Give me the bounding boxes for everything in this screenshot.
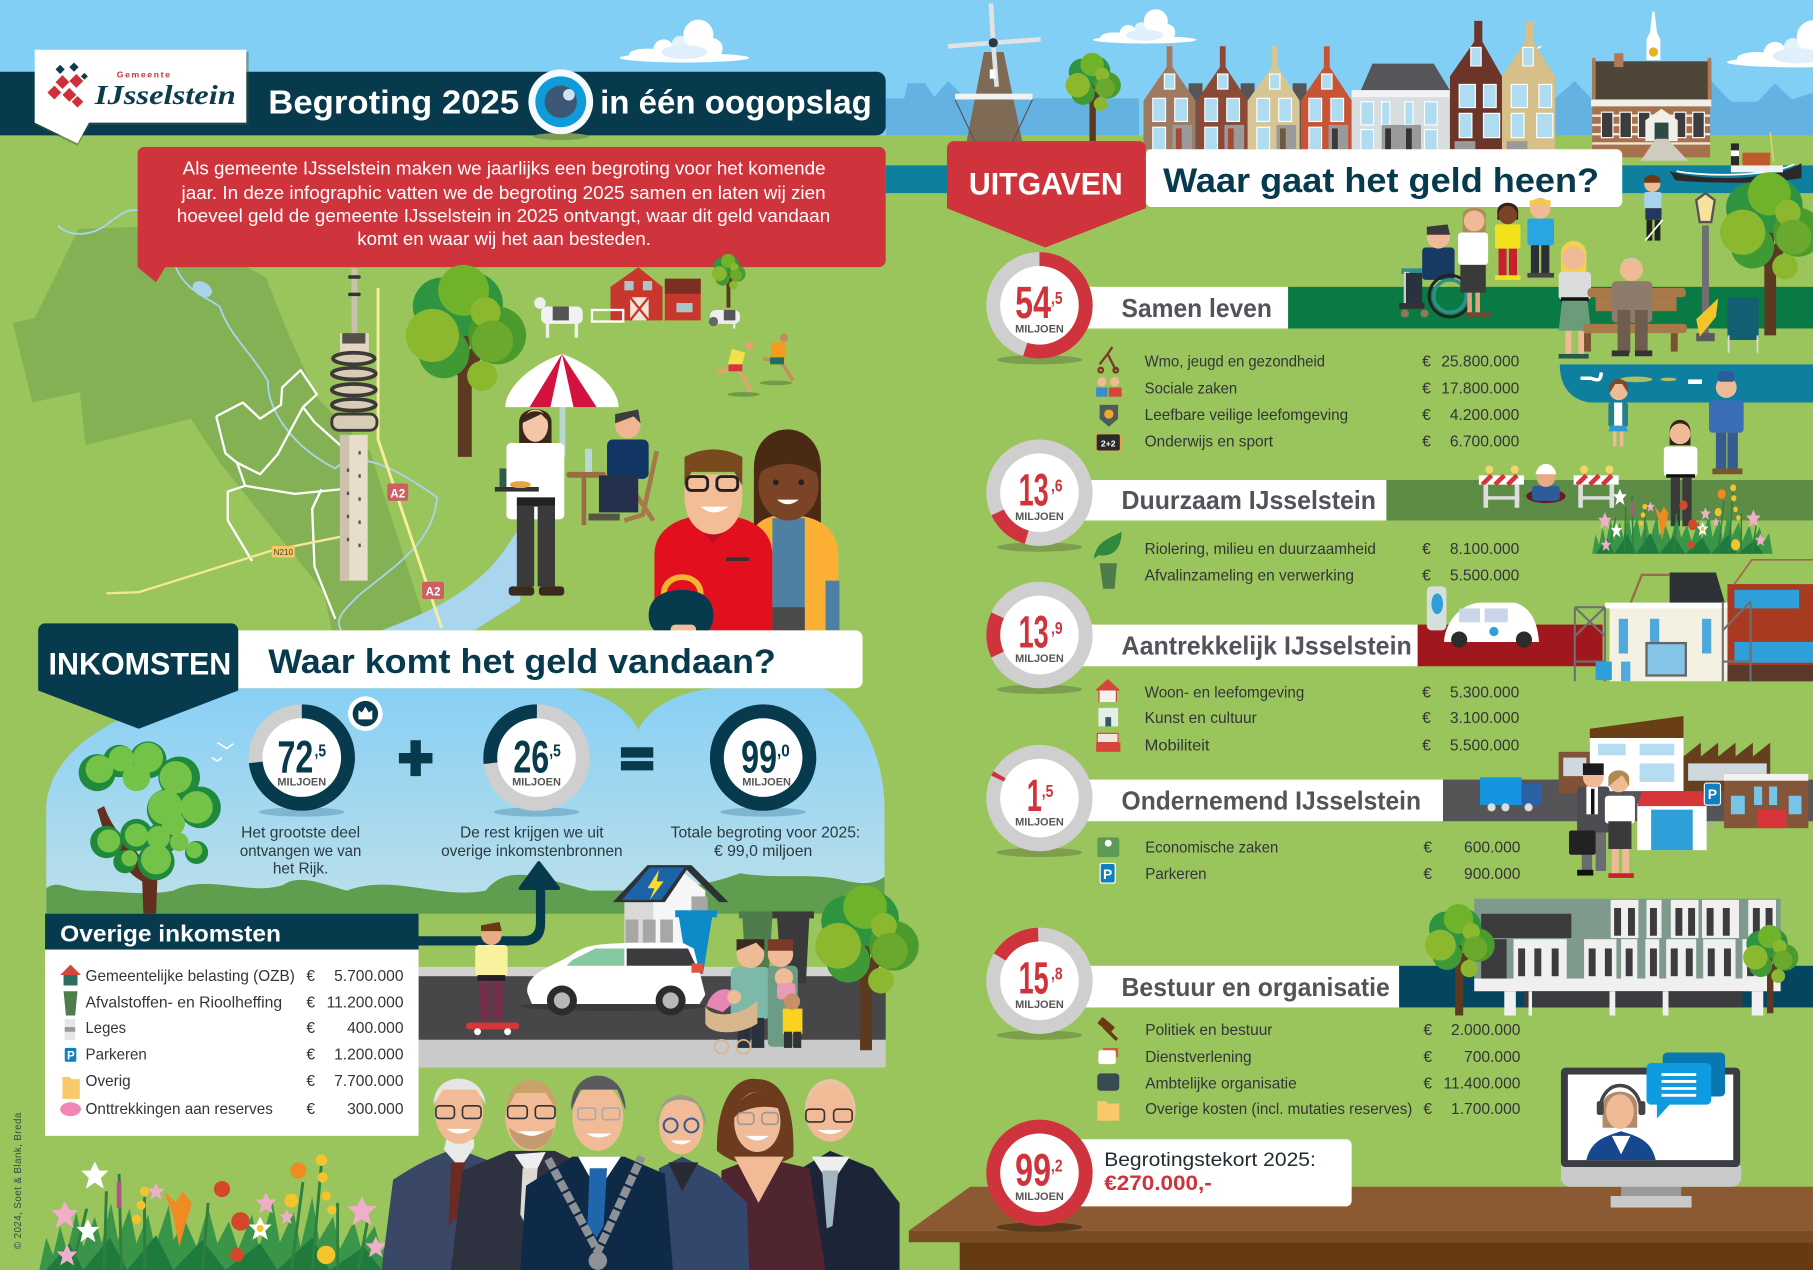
list: Aantrekkelijk	[1095, 679, 1520, 755]
white family car	[520, 943, 705, 1016]
icon: chalkboard: 2+2	[1101, 438, 1116, 448]
town office building	[1474, 899, 1781, 1016]
income rows: Parkeren	[86, 1046, 147, 1063]
icon: castle	[1098, 708, 1118, 726]
spending lists	[1094, 347, 1521, 1121]
list: Bestuur: 2.000.000	[1451, 1022, 1521, 1039]
list: Ondernemend: Parkeren	[1145, 866, 1207, 883]
list: Samen leven: €	[1422, 407, 1431, 424]
donut 99,2	[993, 1127, 1086, 1232]
small tree near barn	[712, 254, 746, 308]
caption overige bronnen	[441, 824, 623, 860]
bar: Duurzaam IJsselstein: Duurzaam IJsselstein	[1122, 487, 1376, 515]
row of canal houses	[1144, 21, 1555, 150]
list: Ondernemend: €	[1423, 839, 1432, 856]
police officer	[1709, 371, 1744, 474]
donut 15,8: MILJOEN	[1015, 999, 1064, 1011]
house 5	[1352, 64, 1450, 150]
caption totale begroting: € 99,0 miljoen	[714, 843, 812, 860]
tree at office right	[1743, 925, 1798, 1013]
donut 54,5	[993, 259, 1086, 364]
donut 15,8	[976, 917, 1103, 1044]
list: Samen leven: Sociale zaken	[1145, 380, 1237, 397]
donut 13,9: MILJOEN	[1015, 653, 1064, 665]
list: Aantrekkelijk: 5.300.000	[1450, 684, 1520, 701]
tree at office left	[1425, 904, 1495, 1016]
list: Samen leven: €	[1422, 354, 1431, 371]
wheelchair group	[1399, 175, 1663, 318]
bar: Ondernemend IJsselstein: Ondernemend IJsselstein	[1122, 788, 1421, 816]
icon: shield	[1100, 405, 1118, 427]
icon: eye	[528, 69, 593, 140]
monitor with customer service agent	[1561, 1068, 1741, 1208]
woman in white shirt	[1664, 420, 1697, 526]
donut 26,5 miljoen: 26	[513, 732, 549, 783]
panel heading	[45, 914, 419, 950]
person 4	[653, 1095, 749, 1270]
caption Rijk: het Rijk.	[273, 860, 328, 877]
seated man at cafe table	[567, 409, 657, 525]
donut 1,5: ,5	[1042, 781, 1054, 801]
house with solar panels	[613, 865, 728, 948]
waste bins	[675, 910, 814, 983]
hockey girl	[1644, 175, 1663, 241]
income rows: €	[306, 968, 315, 985]
icon: gavel	[1097, 1017, 1117, 1040]
IJsselstein tower	[332, 268, 377, 581]
council portraits	[382, 1076, 900, 1270]
list: Aantrekkelijk: €	[1422, 710, 1431, 727]
man	[654, 449, 772, 630]
icon: speech bubble	[1098, 1048, 1118, 1064]
caption totale begroting	[671, 824, 860, 860]
icon: piggy bank	[60, 1102, 81, 1116]
list: Aantrekkelijk: Woon- en leefomgeving	[1145, 684, 1304, 701]
list: Samen leven: Leefbare veilige leefomgeving	[1145, 407, 1348, 424]
bar: Duurzaam IJsselstein	[1081, 480, 1813, 520]
icon: parking: P	[1103, 866, 1112, 882]
building under construction	[1575, 560, 1813, 681]
litter bin	[1727, 297, 1759, 353]
logo Gemeente IJsselstein: IJsselstein	[94, 80, 236, 111]
list: Duurzaam: €	[1422, 568, 1431, 585]
road badge A2 south	[422, 582, 444, 599]
title text right: in één oogopslag	[600, 84, 872, 121]
heading INKOMSTEN: INKOMSTEN	[49, 646, 231, 681]
icon: banknote	[1097, 837, 1119, 857]
donut 99,0 miljoen: MILJOEN	[742, 776, 791, 788]
road works barriers and worker	[1479, 464, 1619, 508]
wheelchair man	[1399, 224, 1471, 318]
intro callout: jaar. In deze infographic vatten we de begroting 2025 samen en laten wij zien	[180, 182, 826, 203]
icon: briefcase	[1097, 1073, 1119, 1091]
girl in yellow	[1495, 203, 1520, 280]
icon: bin	[1100, 563, 1117, 589]
intro callout	[138, 147, 886, 282]
desk	[909, 1187, 1813, 1270]
income rows: Onttrekkingen aan reserves	[86, 1101, 273, 1118]
list: Bestuur: Politiek en bestuur	[1145, 1022, 1272, 1039]
income rows: 1.200.000	[334, 1046, 404, 1063]
town hall	[1591, 12, 1711, 161]
tree by the tower	[406, 265, 526, 457]
road badge N210: N210	[274, 548, 293, 557]
windmill	[948, 3, 1041, 141]
list: Duurzaam	[1094, 532, 1520, 589]
family with pram	[705, 939, 802, 1054]
income rows: Overig	[86, 1073, 131, 1090]
list: Duurzaam: Riolering, milieu en duurzaamheid	[1145, 541, 1376, 558]
list: Aantrekkelijk: 5.500.000	[1450, 738, 1520, 755]
list: Samen leven: 25.800.000	[1441, 354, 1520, 371]
caption Rijk: Het grootste deel	[241, 824, 360, 841]
income rows: €	[306, 1101, 315, 1118]
road badge A2: A2	[390, 488, 405, 500]
donut 99,0 miljoen	[717, 711, 809, 817]
begrotingstekort	[1064, 1139, 1352, 1206]
donut 99,0 miljoen: 99	[741, 732, 777, 783]
donut 54,5: ,5	[1051, 288, 1063, 308]
section header UITGAVEN	[947, 141, 1622, 248]
bar: Ondernemend IJsselstein	[1081, 780, 1813, 821]
business buildings: P	[1708, 786, 1717, 802]
map of IJsselstein	[13, 210, 520, 630]
person 6	[786, 1079, 900, 1270]
icon: walker	[1098, 347, 1118, 372]
list: Aantrekkelijk: Kunst en cultuur	[1145, 710, 1257, 727]
donut 15,8: 15	[1019, 953, 1049, 1004]
list: Bestuur: Ambtelijke organisatie	[1145, 1075, 1297, 1092]
icon: purse	[649, 577, 713, 641]
donut 13,9: 13	[1019, 607, 1049, 658]
bar: Bestuur en organisatie: Bestuur en organisatie	[1122, 974, 1390, 1002]
caption totale begroting: Totale begroting voor 2025:	[671, 824, 860, 841]
panel heading: Overige inkomsten	[60, 921, 281, 947]
couple with purse	[649, 429, 839, 641]
donut 72,5 miljoen: ,5	[314, 740, 326, 760]
person 2	[451, 1080, 590, 1270]
list: Aantrekkelijk: €	[1422, 684, 1431, 701]
business buildings	[1559, 716, 1808, 850]
house 1	[1144, 46, 1196, 150]
list: Bestuur: 1.700.000	[1451, 1101, 1521, 1118]
tree near lamp	[1720, 172, 1813, 335]
runners	[717, 334, 793, 397]
caption overige bronnen: overige inkomstenbronnen	[441, 843, 623, 860]
tree between windmill and houses	[1066, 53, 1121, 141]
list: Bestuur: Dienstverlening	[1145, 1049, 1252, 1066]
icon: parking	[65, 1048, 76, 1062]
donut 54,5: MILJOEN	[1015, 324, 1064, 336]
clouds	[620, 9, 1813, 67]
donut 13,9	[978, 574, 1101, 696]
list: Bestuur: 700.000	[1464, 1049, 1521, 1066]
caption Rijk: ontvangen we van	[240, 843, 361, 860]
delivery truck	[1480, 777, 1541, 811]
arrow up to donut	[419, 863, 558, 944]
plus sign	[399, 740, 432, 776]
house 3	[1248, 46, 1300, 150]
donut 13,6: 13	[1019, 464, 1049, 515]
donut 26,5 miljoen: ,5	[549, 740, 561, 760]
girl in teal jacket	[1608, 379, 1628, 446]
income rows: €	[306, 1073, 315, 1090]
farm barn and cows	[534, 267, 740, 338]
parasol	[505, 354, 619, 457]
income rows: 400.000	[347, 1020, 404, 1037]
icon: leges	[65, 1019, 75, 1040]
icon: bin	[64, 991, 77, 1016]
list: Bestuur: Overige kosten (incl. mutaties reserves)	[1145, 1101, 1412, 1118]
chat bubbles	[1646, 1053, 1725, 1118]
income rows: €	[306, 1046, 315, 1063]
street lamp	[1696, 193, 1715, 341]
list: Samen leven: €	[1422, 380, 1431, 397]
waitress	[495, 409, 564, 596]
donut 72,5 miljoen	[256, 711, 348, 817]
list: Bestuur	[1097, 1017, 1521, 1121]
donut 72,5 miljoen: MILJOEN	[277, 776, 326, 788]
house 2	[1197, 46, 1248, 150]
road badge A2 south: A2	[426, 587, 440, 599]
person 5	[717, 1079, 826, 1270]
copyright: © 2024, Soet & Blank, Breda	[13, 1112, 24, 1249]
list: Samen leven: Onderwijs en sport	[1145, 433, 1274, 450]
donut 1,5: 1	[1027, 770, 1042, 821]
person 3: mayor with chain	[520, 1076, 673, 1270]
birds	[212, 44, 1541, 761]
bar: Samen leven: Samen leven	[1122, 295, 1272, 323]
list: Duurzaam: 8.100.000	[1450, 541, 1520, 558]
title text left: Begroting 2025	[268, 84, 519, 121]
tree right of road	[815, 885, 919, 1050]
donut 26,5 miljoen	[485, 706, 588, 817]
house 7	[1502, 21, 1555, 150]
donut 13,9: ,9	[1051, 618, 1063, 638]
list: Aantrekkelijk: Mobiliteit	[1145, 738, 1210, 755]
caption Rijk	[240, 824, 361, 877]
donut 13,6: MILJOEN	[1015, 511, 1064, 523]
list: Samen leven: €	[1422, 433, 1431, 450]
list: Bestuur: €	[1423, 1075, 1432, 1092]
icon: parking	[1100, 863, 1116, 884]
list: Bestuur: €	[1423, 1022, 1432, 1039]
bar: Bestuur en organisatie	[1081, 966, 1813, 1007]
icon: Rijk badge	[348, 696, 383, 731]
donut 15,8: ,8	[1051, 964, 1063, 984]
house 4	[1301, 46, 1352, 150]
pond with ducks	[1560, 364, 1813, 403]
woman	[749, 429, 839, 630]
heading waar komt: Waar komt het geld vandaan?	[268, 643, 776, 681]
intro callout: hoeveel geld de gemeente IJsselstein in 2025 ontvangt, waar dit geld vandaan	[177, 205, 830, 226]
logo Gemeente IJsselstein: Gemeente	[117, 69, 170, 79]
list: Bestuur: €	[1423, 1101, 1432, 1118]
sky panel income	[46, 688, 886, 1068]
icon: leaf	[1094, 532, 1122, 559]
icon: people	[1096, 377, 1122, 397]
donut 99,2: ,2	[1051, 1156, 1063, 1176]
donut 13,6	[982, 436, 1097, 552]
bar: Aantrekkelijk IJsselstein	[1081, 625, 1603, 666]
list: Ondernemend: €	[1423, 866, 1432, 883]
boy on skateboard	[466, 922, 519, 1035]
list: Duurzaam: Afvalinzameling en verwerking	[1145, 568, 1354, 585]
intro callout: komt en waar wij het aan besteden.	[357, 228, 651, 249]
list: Ondernemend: 600.000	[1464, 839, 1521, 856]
list: Ondernemend: 900.000	[1464, 866, 1521, 883]
income rows: €	[306, 994, 315, 1011]
list: Duurzaam: €	[1422, 541, 1431, 558]
equals sign	[621, 747, 653, 770]
bench with elderly man	[1583, 258, 1687, 356]
donut 54,5: 54	[1015, 277, 1051, 328]
section header INKOMSTEN	[38, 623, 863, 729]
kite	[1696, 298, 1718, 337]
income rows: 300.000	[347, 1101, 404, 1118]
donut 26,5 miljoen: MILJOEN	[512, 776, 561, 788]
list: Samen leven	[1096, 347, 1520, 451]
logo Gemeente IJsselstein	[35, 50, 249, 146]
income rows: Afvalstoffen- en Rioolheffing	[86, 994, 282, 1011]
donut 13,6: ,6	[1051, 476, 1063, 496]
road badge A2	[387, 483, 408, 501]
business man and woman	[1569, 763, 1635, 878]
heading UITGAVEN: UITGAVEN	[969, 166, 1123, 201]
icon: parking: P	[67, 1050, 75, 1062]
list: Samen leven: 17.800.000	[1441, 380, 1520, 397]
caption overige bronnen: De rest krijgen we uit	[460, 824, 604, 841]
donut 99,2: 99	[1015, 1145, 1051, 1196]
woman in white blouse	[1458, 208, 1490, 317]
income rows: Gemeentelijke belasting (OZB)	[86, 968, 295, 985]
income rows	[86, 968, 404, 1118]
income rows: 7.700.000	[334, 1073, 404, 1090]
list: Samen leven: Wmo, jeugd en gezondheid	[1145, 354, 1325, 371]
list: Ondernemend: Economische zaken	[1145, 839, 1278, 856]
donut 1,5: MILJOEN	[1015, 816, 1064, 828]
list: Bestuur: 11.400.000	[1444, 1075, 1521, 1092]
list: Samen leven: 4.200.000	[1450, 407, 1520, 424]
person 1	[382, 1079, 509, 1270]
income rows: €	[306, 1020, 315, 1037]
panel: overige inkomsten	[45, 914, 419, 1136]
income rows: 5.700.000	[334, 968, 404, 985]
flower bed right	[1592, 484, 1773, 554]
bar: Samen leven	[1081, 287, 1813, 328]
bar: Aantrekkelijk IJsselstein: Aantrekkelijk IJsselstein	[1122, 633, 1412, 661]
road badge N210	[272, 546, 295, 558]
donut 72,5 miljoen: 72	[278, 732, 313, 783]
icon: house	[1095, 679, 1120, 702]
icon: house	[60, 965, 81, 985]
list: Samen leven: 6.700.000	[1450, 433, 1520, 450]
electric car and charger	[1427, 586, 1539, 648]
blonde woman	[1559, 241, 1591, 359]
icon: chalkboard	[1096, 434, 1120, 451]
icon: car	[1096, 733, 1120, 752]
list: Aantrekkelijk: €	[1422, 738, 1431, 755]
heading waar gaat: Waar gaat het geld heen?	[1163, 162, 1599, 200]
list: Ondernemend	[1097, 837, 1521, 884]
icon: folder	[62, 1077, 80, 1099]
steam boat	[1670, 132, 1801, 183]
income rows: Leges	[86, 1020, 126, 1037]
donut 99,2: MILJOEN	[1015, 1191, 1064, 1203]
icon: folder	[1097, 1101, 1119, 1121]
donut 1,5	[978, 737, 1101, 860]
wildflowers	[39, 1154, 400, 1270]
list: Aantrekkelijk: 3.100.000	[1450, 710, 1520, 727]
house 6	[1450, 21, 1502, 150]
boy in blue	[1527, 198, 1554, 278]
income rows: 11.200.000	[327, 994, 404, 1011]
top title bar	[0, 69, 886, 140]
left tree in sky panel	[79, 741, 221, 914]
begrotingstekort: Begrotingstekort 2025:	[1104, 1149, 1316, 1171]
begrotingstekort: €270.000,-	[1104, 1172, 1212, 1195]
donut 99,0 miljoen: ,0	[777, 740, 790, 760]
list: Bestuur: €	[1423, 1049, 1432, 1066]
intro callout: Als gemeente IJsselstein maken we jaarlijks een begroting voor het komende	[183, 158, 826, 179]
list: Duurzaam: 5.500.000	[1450, 568, 1520, 585]
panel list	[45, 950, 419, 1136]
